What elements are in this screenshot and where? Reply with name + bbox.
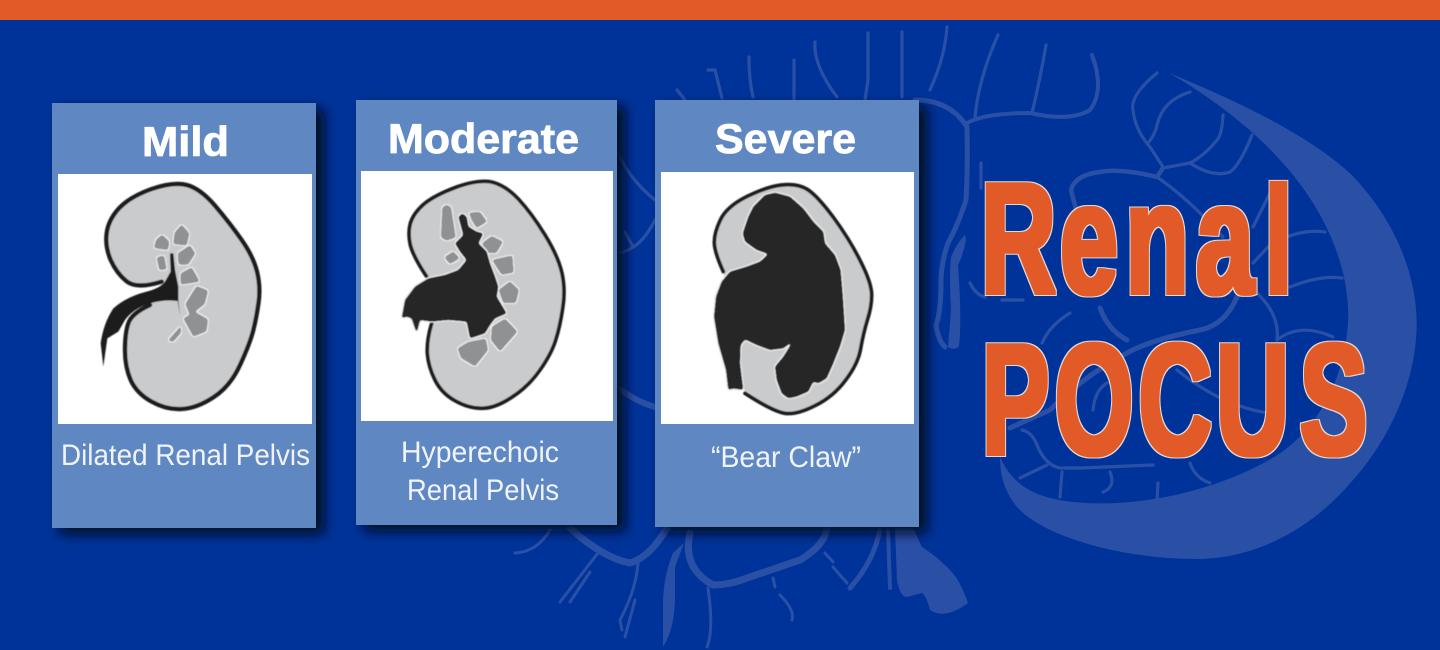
top orange bar: [0, 0, 1440, 20]
severe image panel: [661, 172, 914, 424]
moderate caption: Hyperechoic: [401, 436, 559, 469]
watermark: right vessel network: [1010, 73, 1342, 500]
moderate caption: [401, 436, 559, 507]
moderate image panel: [361, 171, 613, 421]
moderate card background: [356, 100, 617, 525]
severe caption: “Bear Claw”: [711, 441, 861, 474]
watermark: second blade vessel: [948, 235, 966, 349]
panel: severe: [655, 100, 919, 527]
icon: kidney with dilated renal pelvis: [101, 184, 259, 409]
severe heading: Severe: [715, 115, 856, 162]
watermark: lower vessel blade: [663, 543, 684, 647]
watermark: crescent capsule: [1000, 73, 1417, 559]
panel: moderate: [356, 100, 617, 525]
watermark: upper vessels: [618, 27, 1098, 407]
watermark: ureter: [895, 528, 968, 614]
moderate caption: Renal Pelvis: [407, 474, 559, 507]
background watermark: kidney vasculature: [515, 27, 1417, 647]
title: [981, 151, 1367, 489]
mild heading: Mild: [142, 118, 229, 165]
title: Renal: [981, 151, 1292, 327]
watermark: lower vessels: [515, 528, 890, 647]
mild image panel: [58, 174, 312, 424]
severe card background: [655, 100, 919, 527]
icon: kidney with bear claw hydronephrosis: [714, 185, 872, 414]
mild card background: [52, 103, 316, 528]
mild caption: Dilated Renal Pelvis: [61, 439, 310, 472]
panel: mild: [52, 103, 316, 528]
moderate heading: Moderate: [388, 115, 579, 162]
title: POCUS: [982, 312, 1367, 489]
icon: kidney with hyperechoic renal pelvis: [402, 181, 564, 408]
